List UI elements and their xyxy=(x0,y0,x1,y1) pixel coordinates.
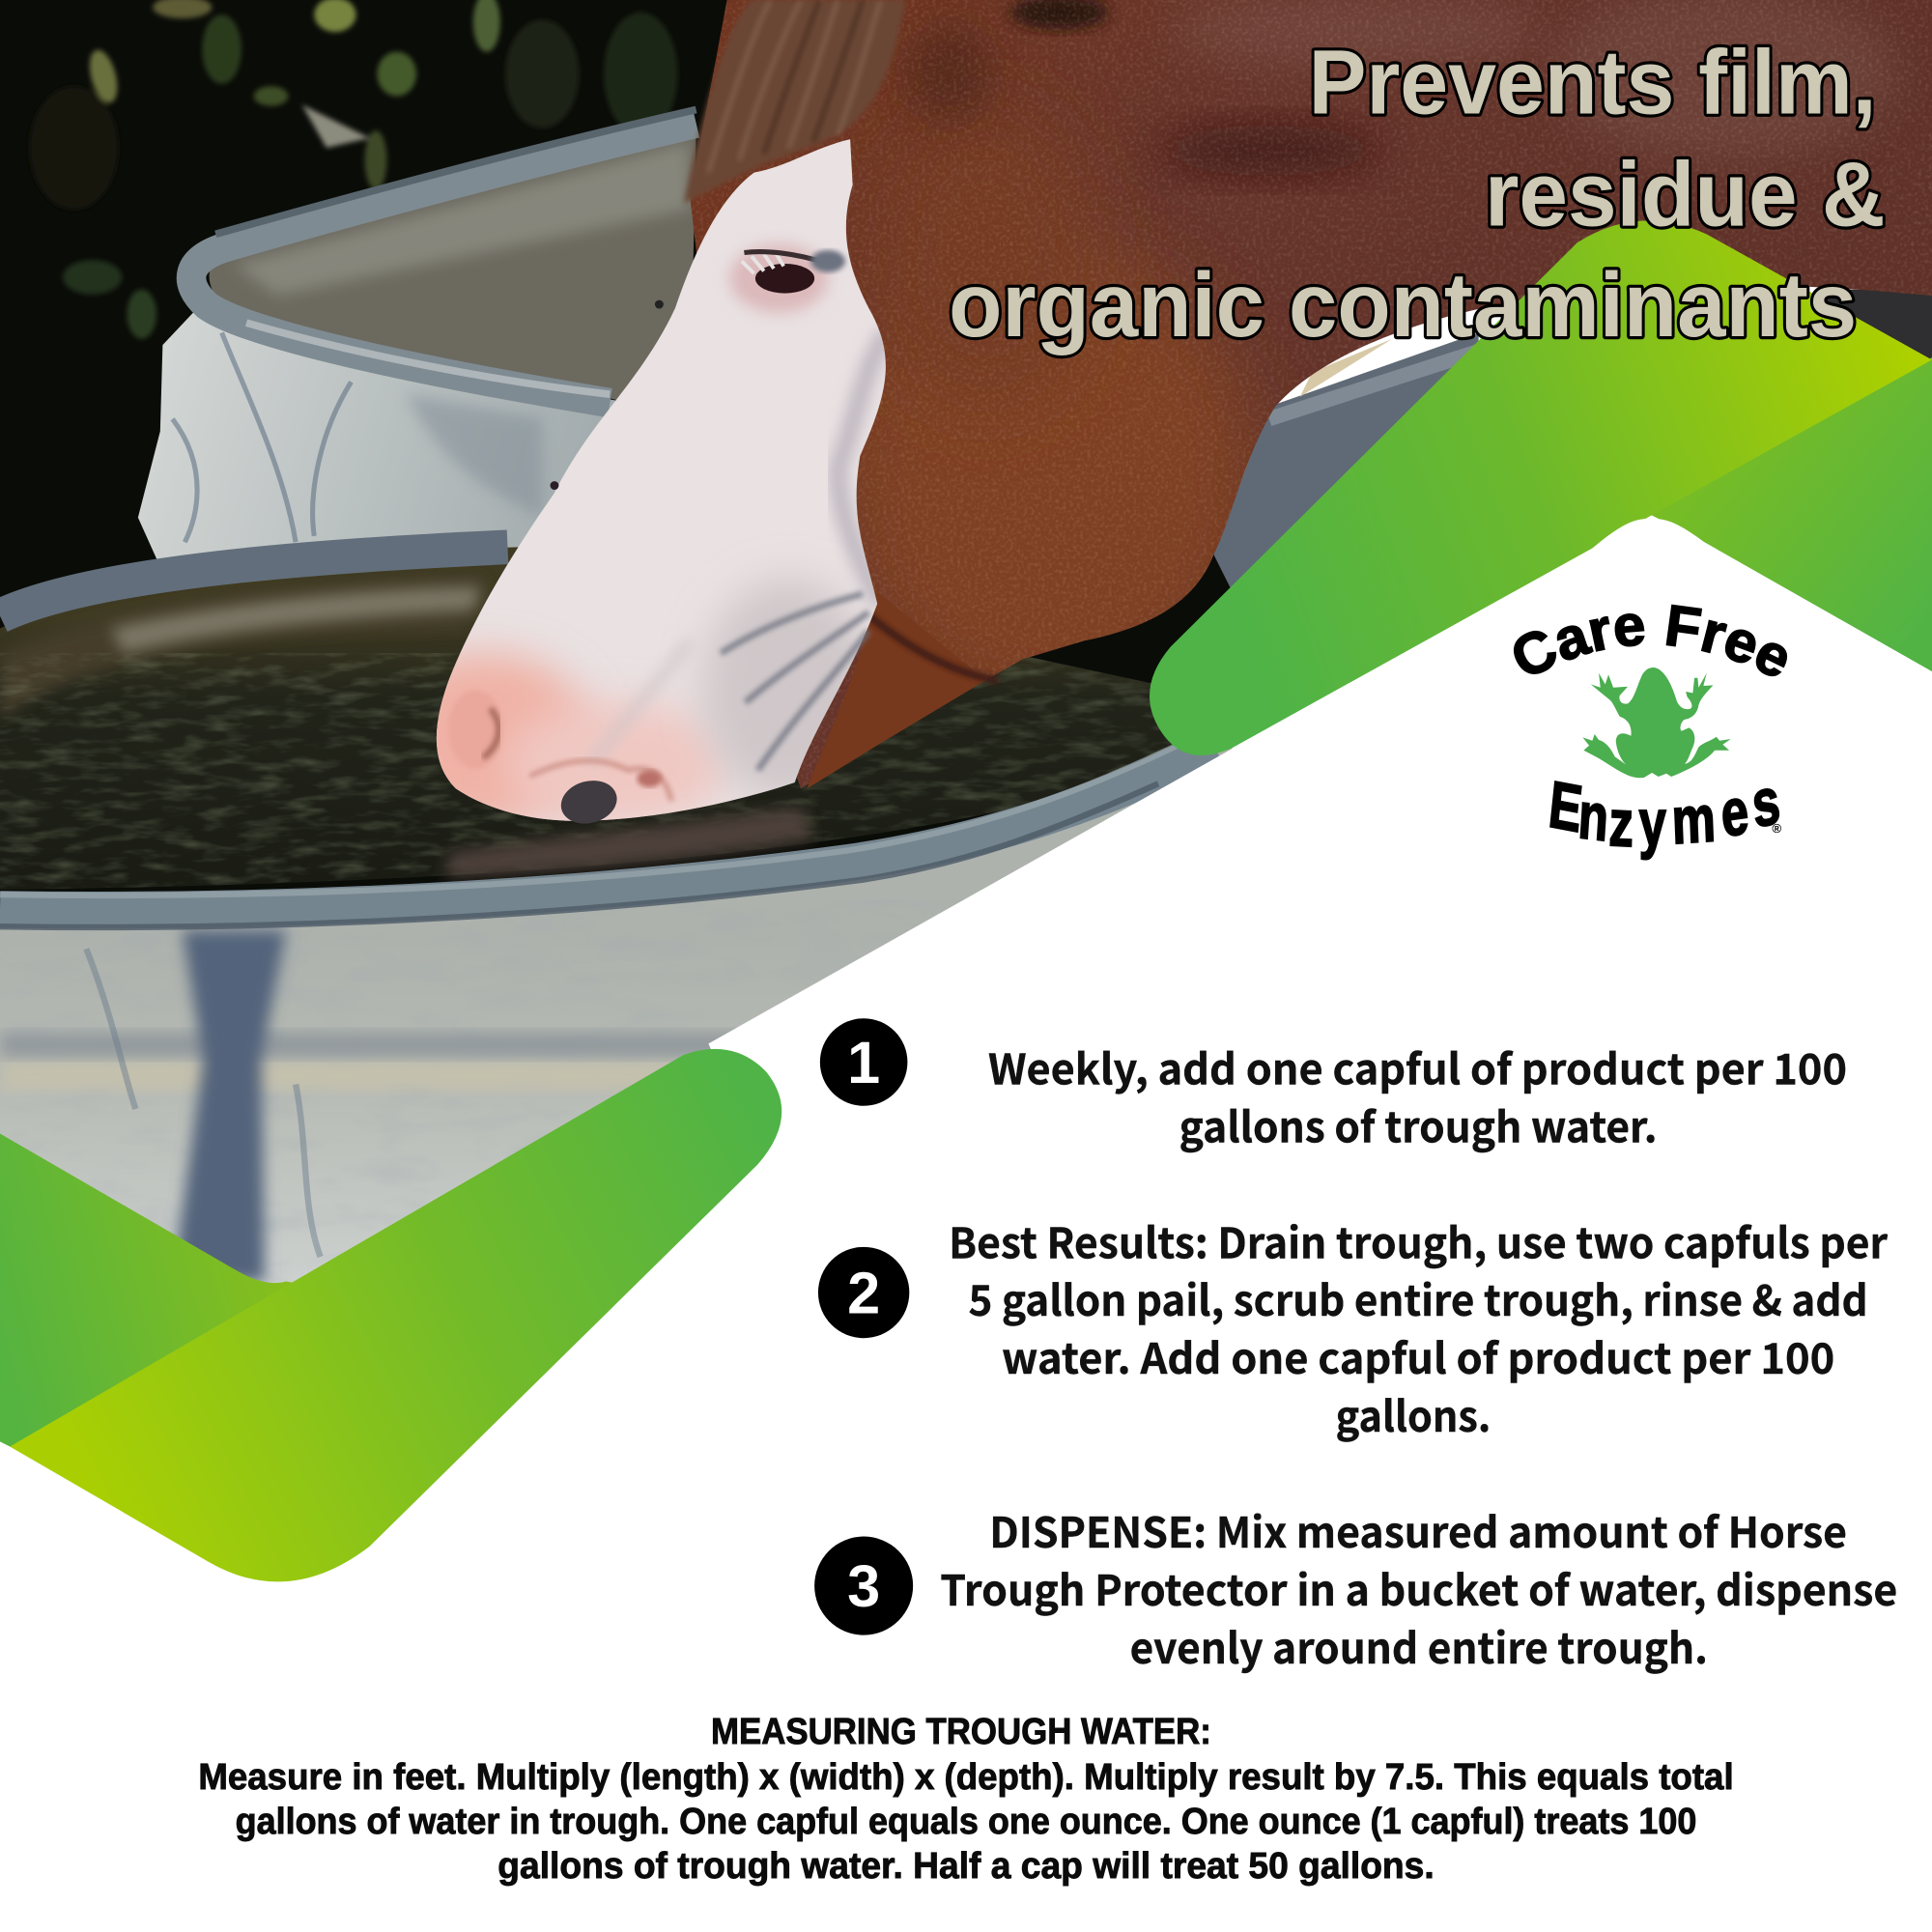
measuring trough water note: gallons of trough water. Half a cap will treat 50 gallons. xyxy=(497,1845,1435,1887)
title: Prevents film, xyxy=(1309,32,1877,133)
step 2 text: water. Add one capful of product per 100 xyxy=(1002,1326,1834,1386)
step 3 xyxy=(814,1500,1897,1676)
step 3 text xyxy=(940,1500,1897,1676)
step 2 text: 5 gallon pail, scrub entire trough, rinse & add xyxy=(969,1268,1868,1328)
photo: horse drinking from a trough xyxy=(0,0,1932,1355)
measuring trough water note: gallons of water in trough. One capful equals one ounce. One ounce (1 capful) treats 100 xyxy=(236,1801,1696,1842)
logo wordmark bottom: Enzymes xyxy=(1546,763,1783,861)
front trough xyxy=(0,547,1233,1355)
icon: green frog xyxy=(1582,668,1731,778)
registered mark: ® xyxy=(1772,821,1781,836)
step 3 text: DISPENSE: Mix measured amount of Horse xyxy=(989,1500,1847,1560)
title xyxy=(949,32,1886,356)
step 2 text: gallons. xyxy=(1336,1384,1491,1444)
step 3 text: evenly around entire trough. xyxy=(1130,1616,1708,1676)
step 2 text xyxy=(949,1210,1888,1444)
horse white blaze and muzzle xyxy=(437,139,886,824)
step 1 text xyxy=(988,1037,1847,1154)
green shape: upper right chevron xyxy=(1150,220,1932,755)
back trough xyxy=(138,110,696,567)
step 2 xyxy=(818,1210,1888,1444)
measuring trough water note xyxy=(198,1711,1734,1887)
number badge 3 xyxy=(814,1537,913,1635)
step 3 text: Trough Protector in a bucket of water, dispense xyxy=(940,1558,1897,1618)
step 2 text: Best Results: Drain trough, use two capfuls per xyxy=(949,1210,1888,1270)
white peak of content panel xyxy=(1589,519,1716,551)
number badge 1 xyxy=(820,1018,907,1106)
measuring trough water note: MEASURING TROUGH WATER: xyxy=(711,1711,1211,1752)
green shape: lower left band xyxy=(0,1133,321,1449)
step 1 text: Weekly, add one capful of product per 100 xyxy=(988,1037,1847,1096)
logo wordmark top: Care Free xyxy=(1513,605,1787,676)
green shape: lower right band xyxy=(1651,357,1932,671)
white content panel xyxy=(0,521,1932,1932)
step 1 xyxy=(820,1018,1847,1154)
number badge 1: 1 xyxy=(847,1030,880,1095)
logo: Care Free Enzymes xyxy=(1513,605,1787,861)
number badge 2 xyxy=(818,1247,909,1338)
green shape: lower left chevron xyxy=(10,1049,781,1581)
number badge 2: 2 xyxy=(847,1261,880,1326)
measuring trough water note: Measure in feet. Multiply (length) x (width) x (depth). Multiply result by 7.5. This equals total xyxy=(198,1756,1734,1798)
mane xyxy=(684,0,906,203)
foliage background xyxy=(0,0,1233,1355)
far trough rim behind neck xyxy=(1213,290,1932,591)
horse body and jaw xyxy=(690,0,1932,801)
title: residue & xyxy=(1485,144,1886,245)
number badge 3: 3 xyxy=(847,1553,880,1619)
step 1 text: gallons of trough water. xyxy=(1179,1094,1658,1154)
title: organic contaminants xyxy=(949,255,1857,356)
